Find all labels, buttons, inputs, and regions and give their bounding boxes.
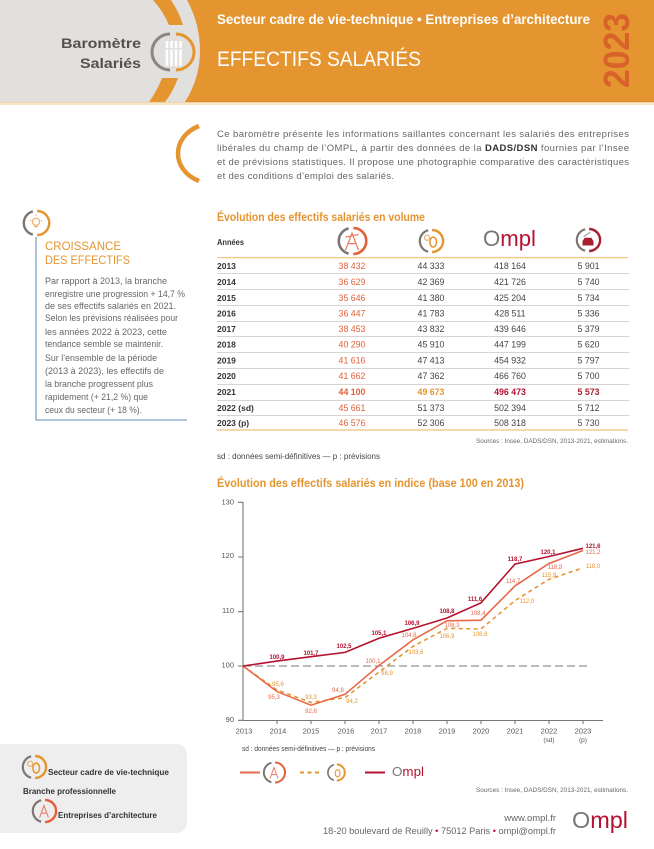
data labels: architecture: 108,4 <box>470 611 486 617</box>
table row 2021: 2021 <box>217 387 236 397</box>
panel: branche professionnelle <box>0 744 187 833</box>
table row 2018: 447 199 <box>494 340 526 350</box>
table row 2018: 2018 <box>217 340 236 350</box>
label: branche: Branche professionnelle <box>23 786 116 796</box>
table row 2021: 44 100 <box>339 387 366 397</box>
data labels: architecture <box>268 550 601 715</box>
data labels: OMPL: 105,1 <box>371 631 387 637</box>
data labels: secteur <box>272 564 601 705</box>
table source: Sources : Insee, DADS/DSN, 2013-2021, estimations. <box>476 439 628 445</box>
table row 2017: 38 453 <box>339 324 366 334</box>
header title: EFFECTIFS SALARIÉS <box>217 48 421 71</box>
icon: secteur <box>23 756 46 778</box>
table row 2023: 46 576 <box>339 418 366 428</box>
table row 2018: 45 910 <box>418 340 445 350</box>
table row 2016: 5 336 <box>577 308 600 318</box>
table row 2016: 36 447 <box>339 308 366 318</box>
data labels: OMPL: 118,7 <box>508 557 523 563</box>
y axis labels: 110 <box>222 606 234 615</box>
data labels: OMPL <box>269 544 601 661</box>
data labels: OMPL: 111,6 <box>468 597 483 603</box>
table row 2014 <box>217 277 600 287</box>
y axis labels: 130 <box>221 498 234 506</box>
panel text: croissance: Sur l’ensemble de la période <box>45 353 157 363</box>
table header <box>217 226 600 254</box>
series: OMPL <box>243 548 583 666</box>
y axis labels: 120 <box>221 551 234 560</box>
panel text: croissance: les années 2022 à 2023, cette <box>45 327 167 337</box>
table row 2014: 36 629 <box>339 277 366 287</box>
table row 2015: 5 734 <box>577 293 600 303</box>
table row 2019: 2019 <box>217 356 236 366</box>
table row 2022: 2022 (sd) <box>217 403 254 413</box>
x axis labels: 2016 <box>338 726 354 736</box>
table row 2019 <box>217 356 600 366</box>
table row 2017: 5 379 <box>577 324 600 334</box>
table row 2023: 2023 (p) <box>217 418 249 428</box>
table row 2014: 421 726 <box>494 277 526 287</box>
chart note: sd : données semi-définitives — p : prévisions <box>242 746 375 753</box>
table row 2022: 45 661 <box>339 403 366 413</box>
panel heading: croissance: DES EFFECTIFS <box>45 253 130 267</box>
panel text: croissance: rapidement (+ 21,2 %) que <box>45 392 148 402</box>
chart legend <box>240 762 424 782</box>
table row 2022: 51 373 <box>418 403 445 413</box>
data labels: architecture: 104,8 <box>401 633 417 639</box>
table row 2023: 508 318 <box>494 418 526 428</box>
data labels: OMPL: 102,5 <box>336 644 352 650</box>
table row 2016: 41 783 <box>418 308 445 318</box>
x axis labels: (sd) <box>543 737 555 744</box>
table row 2022: 502 394 <box>494 403 526 413</box>
data labels: OMPL: 108,8 <box>439 609 455 615</box>
panel text: croissance: enregistre une progression + 14,7 % <box>45 289 185 299</box>
header label: Baromètre Salariés: Salariés <box>80 55 141 71</box>
data labels: OMPL: 100,9 <box>269 655 285 661</box>
data labels: secteur: 93,3 <box>305 695 317 701</box>
table row 2013: 2013 <box>217 261 236 271</box>
icon: entreprises d'architecture <box>339 228 366 254</box>
data labels: architecture: 118,8 <box>548 565 563 571</box>
table row 2020: 47 362 <box>418 371 445 381</box>
table row 2016: 2016 <box>217 308 236 318</box>
legend icon: secteur <box>328 764 345 780</box>
table row 2020: 2020 <box>217 371 236 381</box>
panel text: croissance: de ses effectifs salariés en 2021. <box>45 301 176 311</box>
panel text: croissance: Par rapport à 2013, la branche <box>45 276 167 286</box>
x axis labels: 2017 <box>371 726 387 736</box>
table row 2013: 44 333 <box>418 261 445 271</box>
intro text: et de prévisions statistiques. Il propose une photographie comparative des caractéristiques <box>217 157 629 168</box>
x axis labels: 2018 <box>405 726 421 736</box>
table row 2021 <box>217 387 600 397</box>
table row 2023: 52 306 <box>418 418 445 428</box>
table heading: Évolution des effectifs salariés en volume <box>217 211 425 224</box>
table row 2018: 5 620 <box>577 340 600 350</box>
legend logo: Ompl: Ompl <box>392 764 424 779</box>
panel text: croissance: ceux du secteur (+ 18 %). <box>45 405 142 415</box>
chart axes <box>238 502 603 724</box>
x axis labels: 2020 <box>473 726 489 736</box>
table row 2021: 496 473 <box>494 387 526 397</box>
y axis labels: 90 <box>226 715 234 724</box>
data labels: architecture: 108,3 <box>444 623 460 629</box>
data labels: secteur: 103,6 <box>408 650 424 656</box>
table row 2017: 43 832 <box>418 324 445 334</box>
data labels: architecture: 100,1 <box>365 659 381 665</box>
x axis labels: 2022 <box>541 726 557 736</box>
table row 2013: 38 432 <box>339 261 366 271</box>
logo: Ompl: Ompl <box>483 226 536 251</box>
data labels: architecture: 94,8 <box>332 688 344 694</box>
header band <box>0 0 654 105</box>
icon: technique automobile <box>577 229 600 251</box>
icon: cadre de vie-technique <box>420 230 443 252</box>
panel: croissance des effectifs <box>24 211 187 420</box>
x axis labels: 2021 <box>507 726 523 736</box>
intro text: Ce baromètre présente les informations saillantes concernant les salariés des entreprises <box>217 129 629 140</box>
x axis labels: 2015 <box>303 726 319 736</box>
data labels: OMPL: 120,1 <box>540 550 556 556</box>
data labels: secteur: 115,9 <box>542 573 557 579</box>
icon: barometer bars <box>152 34 194 70</box>
table row 2022: 5 712 <box>577 403 600 413</box>
footer contact: 18-20 boulevard de Reuilly • 75012 Paris • ompl@ompl.fr <box>323 826 556 837</box>
table header: Années <box>217 238 245 247</box>
data labels: OMPL: 106,9 <box>404 621 420 627</box>
table row 2023: 5 730 <box>577 418 600 428</box>
series: entreprises d'architecture <box>243 550 583 705</box>
table row 2020: 5 700 <box>577 371 600 381</box>
table row 2016: 428 511 <box>494 308 526 318</box>
panel text: croissance <box>45 276 185 415</box>
table: effectifs en volume <box>217 226 629 430</box>
data labels: OMPL: 101,7 <box>303 651 319 657</box>
x axis labels: 2023 <box>575 726 591 736</box>
data labels: OMPL: 121,6 <box>585 544 601 550</box>
y axis labels: 100 <box>221 660 234 670</box>
table row 2014: 42 369 <box>418 277 445 287</box>
panel heading: croissance <box>45 239 130 267</box>
table row 2017: 439 646 <box>494 324 526 334</box>
x axis labels: 2014 <box>270 726 286 736</box>
header subtitle: Secteur cadre de vie-technique • Entreprises d’architecture <box>217 12 590 27</box>
table row 2020: 466 760 <box>494 371 526 381</box>
data labels: secteur: 118,0 <box>586 564 601 570</box>
intro text: et des conditions d’emploi des salariés. <box>217 171 394 182</box>
icon: architecture <box>33 800 56 822</box>
panel text: croissance: la branche progressent plus <box>45 379 153 389</box>
data labels: secteur: 94,2 <box>346 699 358 705</box>
panel text: croissance: (2013 à 2023), les effectifs de <box>45 366 164 376</box>
table row 2019: 47 413 <box>418 356 445 366</box>
table row 2014: 5 740 <box>577 277 600 287</box>
header label: Baromètre Salariés <box>61 35 141 71</box>
intro bracket <box>178 126 199 181</box>
label: architecture: Entreprises d’architecture <box>58 810 157 820</box>
intro text: libérales du champ de l’OMPL, à partir des données de la DADS/DSN fournies par l’Insee <box>217 143 629 154</box>
table row 2014: 2014 <box>217 277 236 287</box>
table row 2015 <box>217 293 600 303</box>
table row 2018 <box>217 340 600 350</box>
table row 2022 <box>217 403 600 413</box>
x axis labels: (p) <box>579 737 587 744</box>
data labels: secteur: 95,6 <box>272 682 284 688</box>
legend icon: architecture <box>264 762 285 782</box>
data labels: secteur: 106,8 <box>472 632 488 638</box>
table row 2017: 2017 <box>217 324 236 334</box>
table row 2019: 454 932 <box>494 356 526 366</box>
table row 2023 <box>217 418 600 428</box>
panel heading: croissance: CROISSANCE <box>45 239 121 253</box>
data labels: secteur: 98,9 <box>381 671 393 677</box>
chart heading: Évolution des effectifs salariés en indice (base 100 en 2013) <box>217 477 524 490</box>
panel text: croissance: Selon les prévisions réalisées pour <box>45 313 178 323</box>
label: secteur: Secteur cadre de vie-technique <box>48 767 169 777</box>
table row 2019: 5 797 <box>577 356 600 366</box>
table row 2016 <box>217 308 600 318</box>
table row 2019: 41 616 <box>339 356 366 366</box>
table row 2020 <box>217 371 600 381</box>
footer contact: www.ompl.fr <box>503 813 556 824</box>
line chart: indice <box>221 498 603 744</box>
data labels: architecture: 92,8 <box>305 709 317 715</box>
table row 2017 <box>217 324 600 334</box>
footer logo: Ompl: Ompl <box>572 807 628 833</box>
table row 2021: 49 673 <box>418 387 445 397</box>
table row 2013: 418 164 <box>494 261 526 271</box>
year 2023: 2023 <box>596 13 637 88</box>
x axis labels <box>236 726 591 744</box>
data labels: architecture: 114,7 <box>506 579 521 585</box>
header label: Baromètre Salariés: Baromètre <box>61 35 141 51</box>
series: secteur cadre de vie-technique <box>243 568 583 702</box>
panel text: croissance: tendance semble se maintenir. <box>45 339 163 349</box>
icon: light bulb <box>24 211 49 235</box>
intro text <box>217 129 629 182</box>
table row 2020: 41 662 <box>339 371 366 381</box>
table row 2013: 5 901 <box>577 261 600 271</box>
x axis labels: 2019 <box>439 726 455 736</box>
table row 2013 <box>217 261 600 271</box>
data labels: architecture: 95,3 <box>268 695 280 701</box>
table row 2015: 425 204 <box>494 293 526 303</box>
chart source: Sources : Insee, DADS/DSN, 2013-2021, estimations. <box>476 788 628 794</box>
data labels: secteur: 106,9 <box>439 634 455 640</box>
x axis labels: 2013 <box>236 726 252 736</box>
table note: sd : données semi-définitives — p : prévisions <box>217 452 380 461</box>
table row 2021: 5 573 <box>577 387 600 397</box>
data labels: secteur: 112,0 <box>520 599 535 605</box>
footer contact <box>323 813 556 837</box>
table row 2015: 35 646 <box>339 293 366 303</box>
y axis labels <box>221 498 234 724</box>
table row 2015: 41 380 <box>418 293 445 303</box>
data labels: architecture: 121,2 <box>585 550 601 556</box>
table row 2015: 2015 <box>217 293 236 303</box>
table row 2018: 40 290 <box>339 340 366 350</box>
